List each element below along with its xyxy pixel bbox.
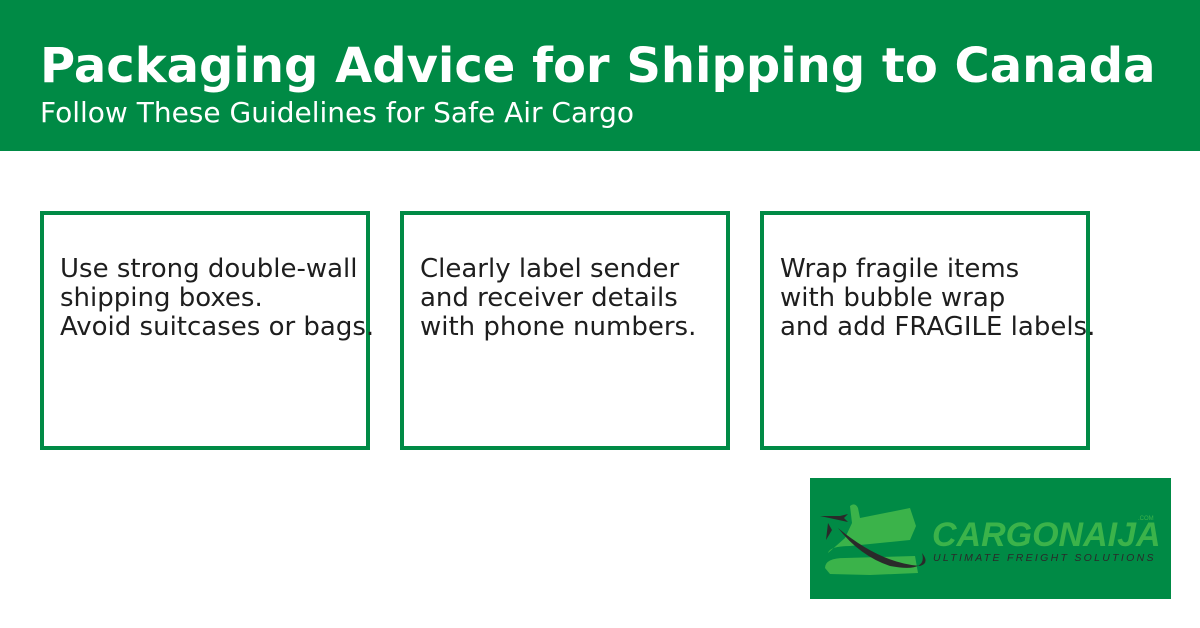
icon: ship and plane bbox=[820, 504, 926, 575]
card: boxes bbox=[40, 211, 370, 450]
card: fragile: Wrap fragile items bbox=[780, 254, 1019, 284]
card: boxes: shipping boxes. bbox=[60, 283, 263, 313]
card: boxes: Use strong double-wall bbox=[60, 254, 358, 284]
card: fragile bbox=[760, 211, 1090, 450]
card: fragile: with bubble wrap bbox=[780, 283, 1005, 313]
card: labels: Clearly label sender bbox=[420, 254, 679, 284]
subtitle: Follow These Guidelines for Safe Air Cargo bbox=[40, 96, 634, 129]
tagline: ULTIMATE FREIGHT SOLUTIONS bbox=[933, 552, 1156, 564]
card: labels: and receiver details bbox=[420, 283, 678, 313]
card: boxes: Avoid suitcases or bags. bbox=[60, 312, 374, 342]
brand name: CARGONAIJA bbox=[932, 516, 1161, 554]
card: fragile: and add FRAGILE labels. bbox=[780, 312, 1095, 342]
logo: cargonaija bbox=[810, 478, 1171, 599]
card: labels: with phone numbers. bbox=[420, 312, 696, 342]
logo: cargonaija: .COM bbox=[1138, 516, 1154, 522]
card: labels bbox=[400, 211, 730, 450]
title: Packaging Advice for Shipping to Canada bbox=[40, 38, 1155, 94]
header banner bbox=[0, 0, 1200, 151]
